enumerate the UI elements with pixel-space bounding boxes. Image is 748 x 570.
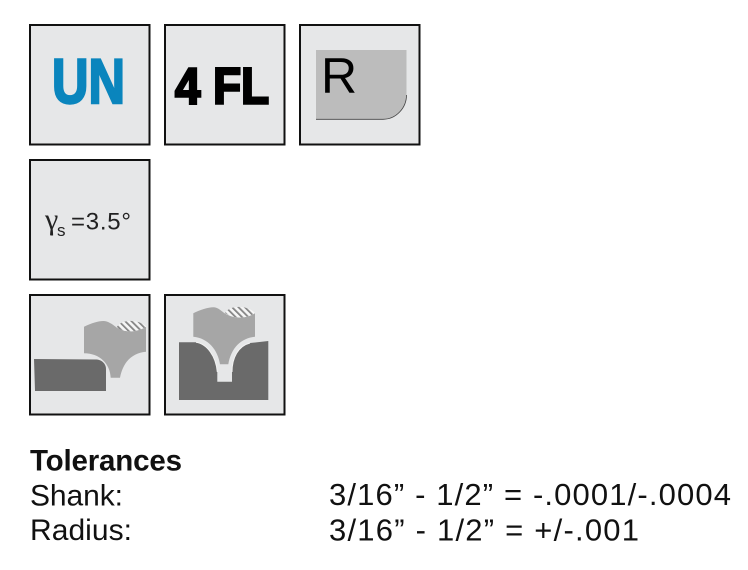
icon: 4 FL flute count (165, 25, 284, 144)
icon: side milling diagram (30, 295, 150, 414)
value: radius tolerance: 3/16” - 1/2” = +/-.001 (329, 512, 639, 548)
label: Shank: Shank: (30, 480, 123, 512)
icon: helix angle: s (57, 221, 66, 240)
value: shank tolerance: 3/16” - 1/2” = -.0001/-.0004 (329, 477, 731, 512)
icon: UN thread type: UN (52, 47, 125, 117)
heading: Tolerances: Tolerances (30, 444, 182, 478)
icon: R corner radius profile: R (321, 48, 357, 104)
icon: slot milling diagram (165, 295, 284, 414)
icon: R corner radius profile (300, 25, 420, 144)
icon: helix angle: =3.5° (71, 208, 131, 236)
icon: helix angle: γ (44, 203, 58, 236)
label: Radius: Radius: (30, 514, 132, 547)
icon: 4 FL flute count: 4 FL (175, 58, 269, 114)
icon: UN thread type (30, 25, 150, 144)
icon: helix angle (30, 160, 150, 280)
